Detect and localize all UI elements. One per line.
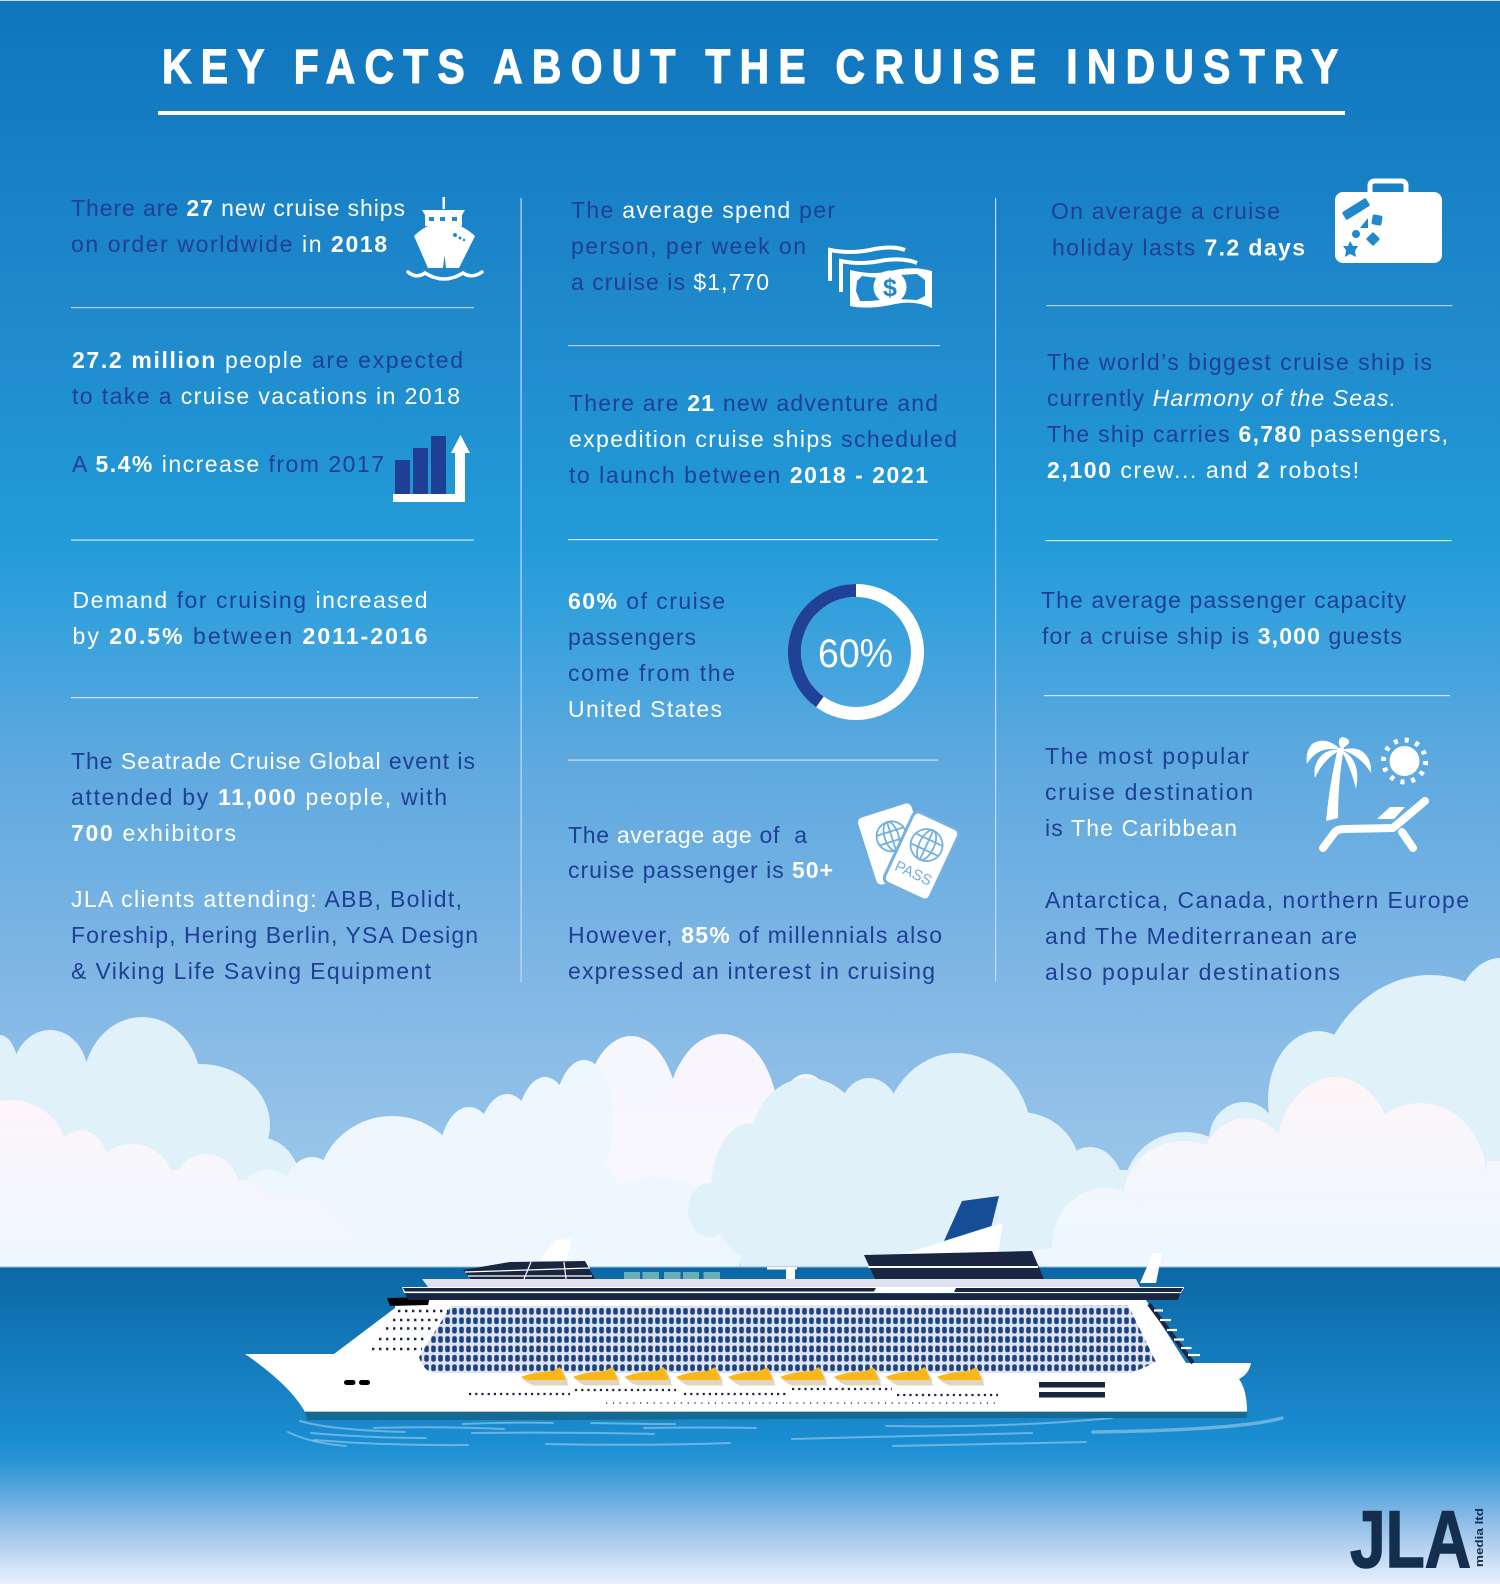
divider	[71, 697, 478, 698]
clouds	[0, 958, 1500, 1323]
icon: suitcase	[1335, 181, 1442, 263]
text: average age: The average age of a	[568, 822, 807, 848]
text: average age	[568, 822, 833, 883]
text: demand increased	[72, 587, 428, 649]
divider	[1046, 540, 1452, 541]
icon: cruise ship	[408, 197, 482, 279]
text: JLA clients: Foreship, Hering Berlin, YSA Design	[71, 922, 478, 948]
text: 27.2 million	[72, 347, 463, 409]
text: demand increased: by 20.5% between 2011-2016	[72, 623, 428, 649]
text: millennials: expressed an interest in cruising	[568, 958, 935, 984]
panel: right column	[1041, 181, 1469, 985]
ship: stern stairs	[1149, 1304, 1200, 1363]
text: other destinations: Antarctica, Canada, northern Europe	[1045, 887, 1469, 913]
text: 5.4% increase: A 5.4% increase from 2017	[72, 451, 384, 477]
divider	[568, 539, 938, 540]
ship: mast	[767, 1267, 797, 1279]
icon: rising bar chart	[393, 435, 470, 502]
text: biggest ship: 2,100 crew... and 2 robots!	[1047, 457, 1359, 483]
ship: decks	[402, 1279, 1184, 1300]
divider	[568, 345, 940, 346]
ship: stern mast	[1140, 1253, 1162, 1283]
text: 60 percent: come from the	[568, 660, 735, 686]
text: biggest ship	[1047, 349, 1448, 483]
text: demand increased: Demand for cruising increased	[72, 587, 428, 613]
text: 60 percent: 60% of cruise	[568, 588, 725, 614]
column divider left	[520, 198, 522, 982]
logo: JLA media ltd: media ltd	[1474, 1508, 1486, 1567]
text: seatrade: 700 exhibitors	[71, 820, 236, 846]
ship: rear bridge sail	[539, 1239, 572, 1262]
text: seatrade: attended by 11,000 people, with	[71, 784, 447, 810]
cloud: centre left	[238, 1034, 778, 1323]
text: biggest ship: currently Harmony of the Seas.	[1047, 385, 1396, 411]
cruise ship illustration	[245, 1196, 1282, 1446]
cloud: back right	[1124, 958, 1500, 1275]
text: 60 percent	[568, 588, 735, 722]
text: 27.2 million: 27.2 million people are expected	[72, 347, 463, 373]
text: average spend	[571, 197, 835, 295]
text: passenger capacity	[1041, 587, 1406, 649]
icon: banknotes	[830, 248, 932, 308]
text: popular destination: is The Caribbean	[1045, 815, 1237, 841]
text: holiday length: holiday lasts 7.2 days	[1052, 234, 1305, 260]
text: new cruise ships	[71, 195, 405, 257]
ship: lifeboats	[521, 1367, 984, 1386]
panel: left column	[71, 195, 482, 984]
text: adventure ships: There are 21 new adventure and	[569, 390, 938, 416]
cloud: small peak	[781, 1074, 831, 1146]
text: 60 percent: passengers	[568, 624, 696, 650]
text: popular destination	[1045, 743, 1253, 841]
icon: banknotes: $	[883, 274, 897, 302]
ship: wake	[288, 1418, 1282, 1446]
text: JLA clients: JLA clients attending: ABB, Bolidt,	[71, 886, 462, 912]
text: holiday length: On average a cruise	[1051, 198, 1280, 224]
ship: rear bridge	[463, 1261, 595, 1279]
column divider right	[995, 198, 996, 981]
ship: teal containers	[624, 1272, 720, 1279]
ship: window block	[419, 1305, 1156, 1373]
text: other destinations	[1045, 887, 1469, 985]
text: passenger capacity: The average passenger capacity	[1041, 587, 1406, 613]
sea	[0, 1267, 1500, 1584]
text: JLA clients: & Viking Life Saving Equipment	[71, 958, 432, 984]
top edge	[0, 0, 1500, 1]
ship: waterline	[305, 1412, 1247, 1420]
ship: hull	[245, 1300, 1251, 1412]
text: other destinations: and The Mediterranean are	[1045, 923, 1357, 949]
divider	[568, 760, 938, 761]
text: average age: cruise passenger is 50+	[568, 857, 833, 883]
icon: palm tree, sun and lounger	[1307, 737, 1426, 848]
text: adventure ships: expedition cruise ships scheduled	[569, 426, 957, 452]
text: JLA clients	[71, 886, 478, 984]
text: average spend: a cruise is $1,770	[571, 269, 769, 295]
cloud: back left	[0, 1017, 302, 1267]
text: new cruise ships: There are 27 new cruise ships	[71, 195, 405, 221]
chart: 60 percent donut: 60%	[818, 632, 893, 676]
divider	[71, 540, 474, 541]
text: average spend: person, per week on	[571, 233, 806, 259]
ship: stern slots	[1039, 1382, 1105, 1398]
icon: passports	[857, 802, 961, 902]
cloud: centre right	[688, 1053, 1130, 1267]
ship: bow funnel	[387, 1297, 430, 1306]
ship: funnel	[864, 1251, 1044, 1279]
text: millennials: However, 85% of millennials also	[568, 922, 942, 948]
divider	[1044, 695, 1450, 696]
text: adventure ships	[569, 390, 957, 488]
title underline	[158, 111, 1345, 115]
ship: funnel sail	[904, 1223, 1003, 1254]
text: 27.2 million: to take a cruise vacations in 2018	[72, 383, 460, 409]
cloud: front right	[1015, 1077, 1500, 1302]
text: biggest ship: The ship carries 6,780 passengers,	[1047, 421, 1448, 447]
text: millennials	[568, 922, 942, 984]
cloud: front left	[0, 1100, 354, 1305]
text: popular destination: cruise destination	[1045, 779, 1253, 805]
text: 60 percent: United States	[568, 696, 722, 722]
text: new cruise ships: on order worldwide in 2018	[71, 231, 387, 257]
icon: passports: PASS	[892, 858, 934, 890]
divider	[1046, 305, 1452, 306]
ship: portholes	[344, 1380, 370, 1385]
text: passenger capacity: for a cruise ship is 3,000 guests	[1042, 623, 1402, 649]
divider	[71, 307, 474, 308]
text: holiday length	[1051, 198, 1305, 260]
text: popular destination: The most popular	[1045, 743, 1249, 769]
text: biggest ship: The world’s biggest cruise ship is	[1047, 349, 1432, 375]
text: other destinations: also popular destinations	[1045, 959, 1340, 985]
panel: middle column	[568, 197, 961, 984]
ship: funnel fin	[944, 1196, 999, 1241]
ship: hull portholes	[469, 1389, 998, 1403]
ship: bow windows	[372, 1311, 448, 1349]
text: adventure ships: to launch between 2018 - 2021	[569, 462, 928, 488]
text: seatrade: The Seatrade Cruise Global event is	[71, 748, 475, 774]
chart: 60 percent donut	[794, 590, 918, 714]
title: KEY FACTS ABOUT THE CRUISE INDUSTRY	[162, 41, 1338, 94]
text: average spend: The average spend per	[571, 197, 835, 223]
text: seatrade	[71, 748, 475, 846]
